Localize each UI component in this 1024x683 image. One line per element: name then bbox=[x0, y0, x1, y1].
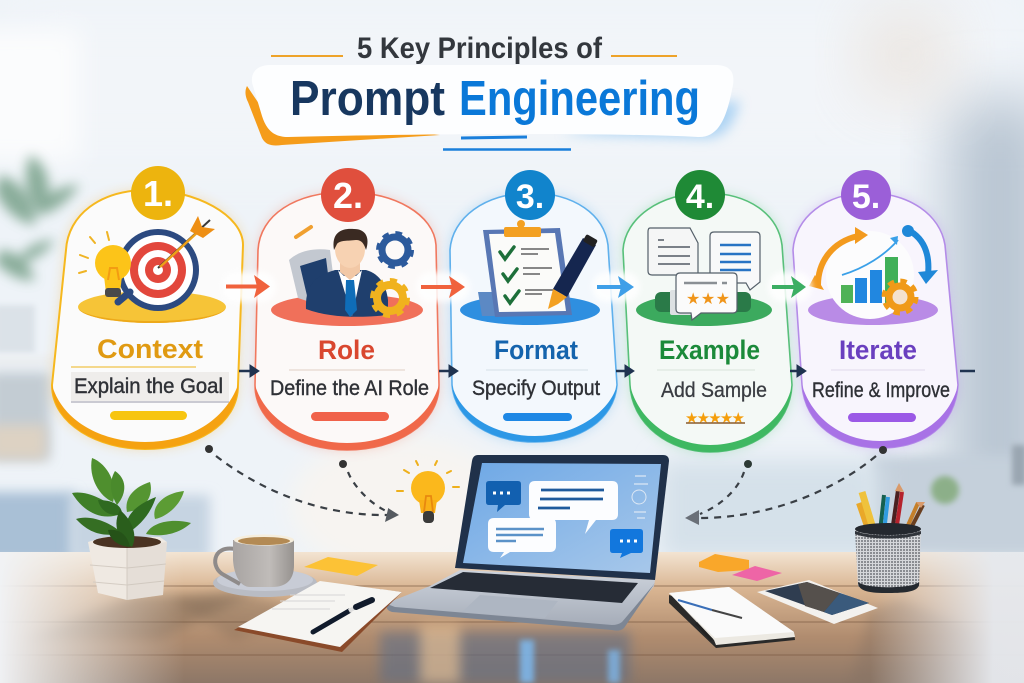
potted plant bbox=[72, 458, 191, 600]
subtitle: Refine & Improve: Refine & Improve bbox=[812, 379, 950, 402]
heading: Example: Example bbox=[659, 335, 760, 365]
dashed arrows to the light bulb bbox=[205, 445, 399, 522]
laptop base and keyboard bbox=[387, 570, 655, 631]
laptop screen bbox=[455, 455, 669, 580]
coffee cup and saucer bbox=[213, 534, 317, 597]
icon: chat documents with stars: ★★★ bbox=[686, 291, 730, 308]
banner with orange tail bbox=[245, 65, 740, 145]
laptop bbox=[387, 455, 669, 631]
arrow: example to iterate bbox=[768, 272, 812, 302]
orange sticky pad bbox=[699, 554, 749, 572]
title bbox=[245, 32, 740, 150]
number badge 4 bbox=[675, 170, 725, 220]
open notebook with pen bbox=[234, 581, 402, 652]
plant leaves bbox=[72, 458, 191, 547]
title line: 5 Key Principles of: 5 Key Principles of bbox=[357, 32, 603, 65]
pencils bbox=[859, 483, 925, 532]
number badge 3 bbox=[505, 170, 555, 220]
panel: 5 Iterate bbox=[793, 170, 958, 448]
dashed arrows to the laptop bbox=[685, 446, 887, 525]
icon: light bulb bbox=[397, 461, 459, 523]
icon: target and light bulb bbox=[78, 216, 226, 323]
number badge 2 bbox=[321, 168, 375, 222]
yellow sticky note bbox=[304, 557, 378, 576]
main heading: Engineering: Engineering bbox=[459, 72, 700, 126]
main heading: Prompt: Prompt bbox=[290, 72, 445, 126]
panel: 1 Context bbox=[52, 166, 243, 449]
arrow: context to role bbox=[222, 272, 276, 302]
number badge 5 bbox=[841, 170, 891, 220]
subtitle: Add Sample: Add Sample bbox=[661, 379, 767, 402]
tablet bbox=[757, 580, 878, 624]
number badge 1: 1. bbox=[143, 173, 173, 214]
icon: business person with gears bbox=[271, 227, 423, 326]
heading: Iterate: Iterate bbox=[839, 335, 917, 365]
rating stars: ★★★★★ bbox=[685, 410, 745, 427]
number badge 4: 4. bbox=[686, 178, 714, 216]
icon: checklist clipboard and pen bbox=[460, 220, 600, 325]
panel: 2 Role bbox=[255, 168, 439, 450]
number badge 5: 5. bbox=[852, 178, 880, 216]
small dark flow arrows bbox=[239, 365, 975, 377]
number badge 1 bbox=[131, 166, 185, 220]
subtitle: Explain the Goal: Explain the Goal bbox=[74, 375, 223, 398]
plant pot bbox=[88, 536, 167, 600]
wooden desk bbox=[0, 552, 1024, 683]
closed notebook with pen bbox=[669, 587, 795, 648]
pencil holder bbox=[855, 483, 925, 593]
pink sticky note bbox=[732, 566, 782, 581]
heading: Role: Role bbox=[318, 335, 375, 365]
number badge 3: 3. bbox=[516, 178, 544, 216]
icon: growth chart, arrows and gear bbox=[808, 225, 938, 325]
heading: Format: Format bbox=[494, 335, 578, 365]
arrow: format to example bbox=[592, 272, 640, 302]
panel: 4 Example bbox=[623, 170, 792, 452]
icon: chat documents with stars bbox=[636, 228, 772, 326]
subtitle: Define the AI Role: Define the AI Role bbox=[270, 377, 429, 400]
heading: Context: Context bbox=[97, 334, 203, 364]
arrow: role to format bbox=[416, 272, 470, 302]
chat bubbles on screen bbox=[486, 476, 648, 558]
subtitle: Specify Output: Specify Output bbox=[472, 377, 600, 400]
number badge 2: 2. bbox=[333, 175, 363, 216]
panel: 3 Format bbox=[450, 170, 617, 442]
